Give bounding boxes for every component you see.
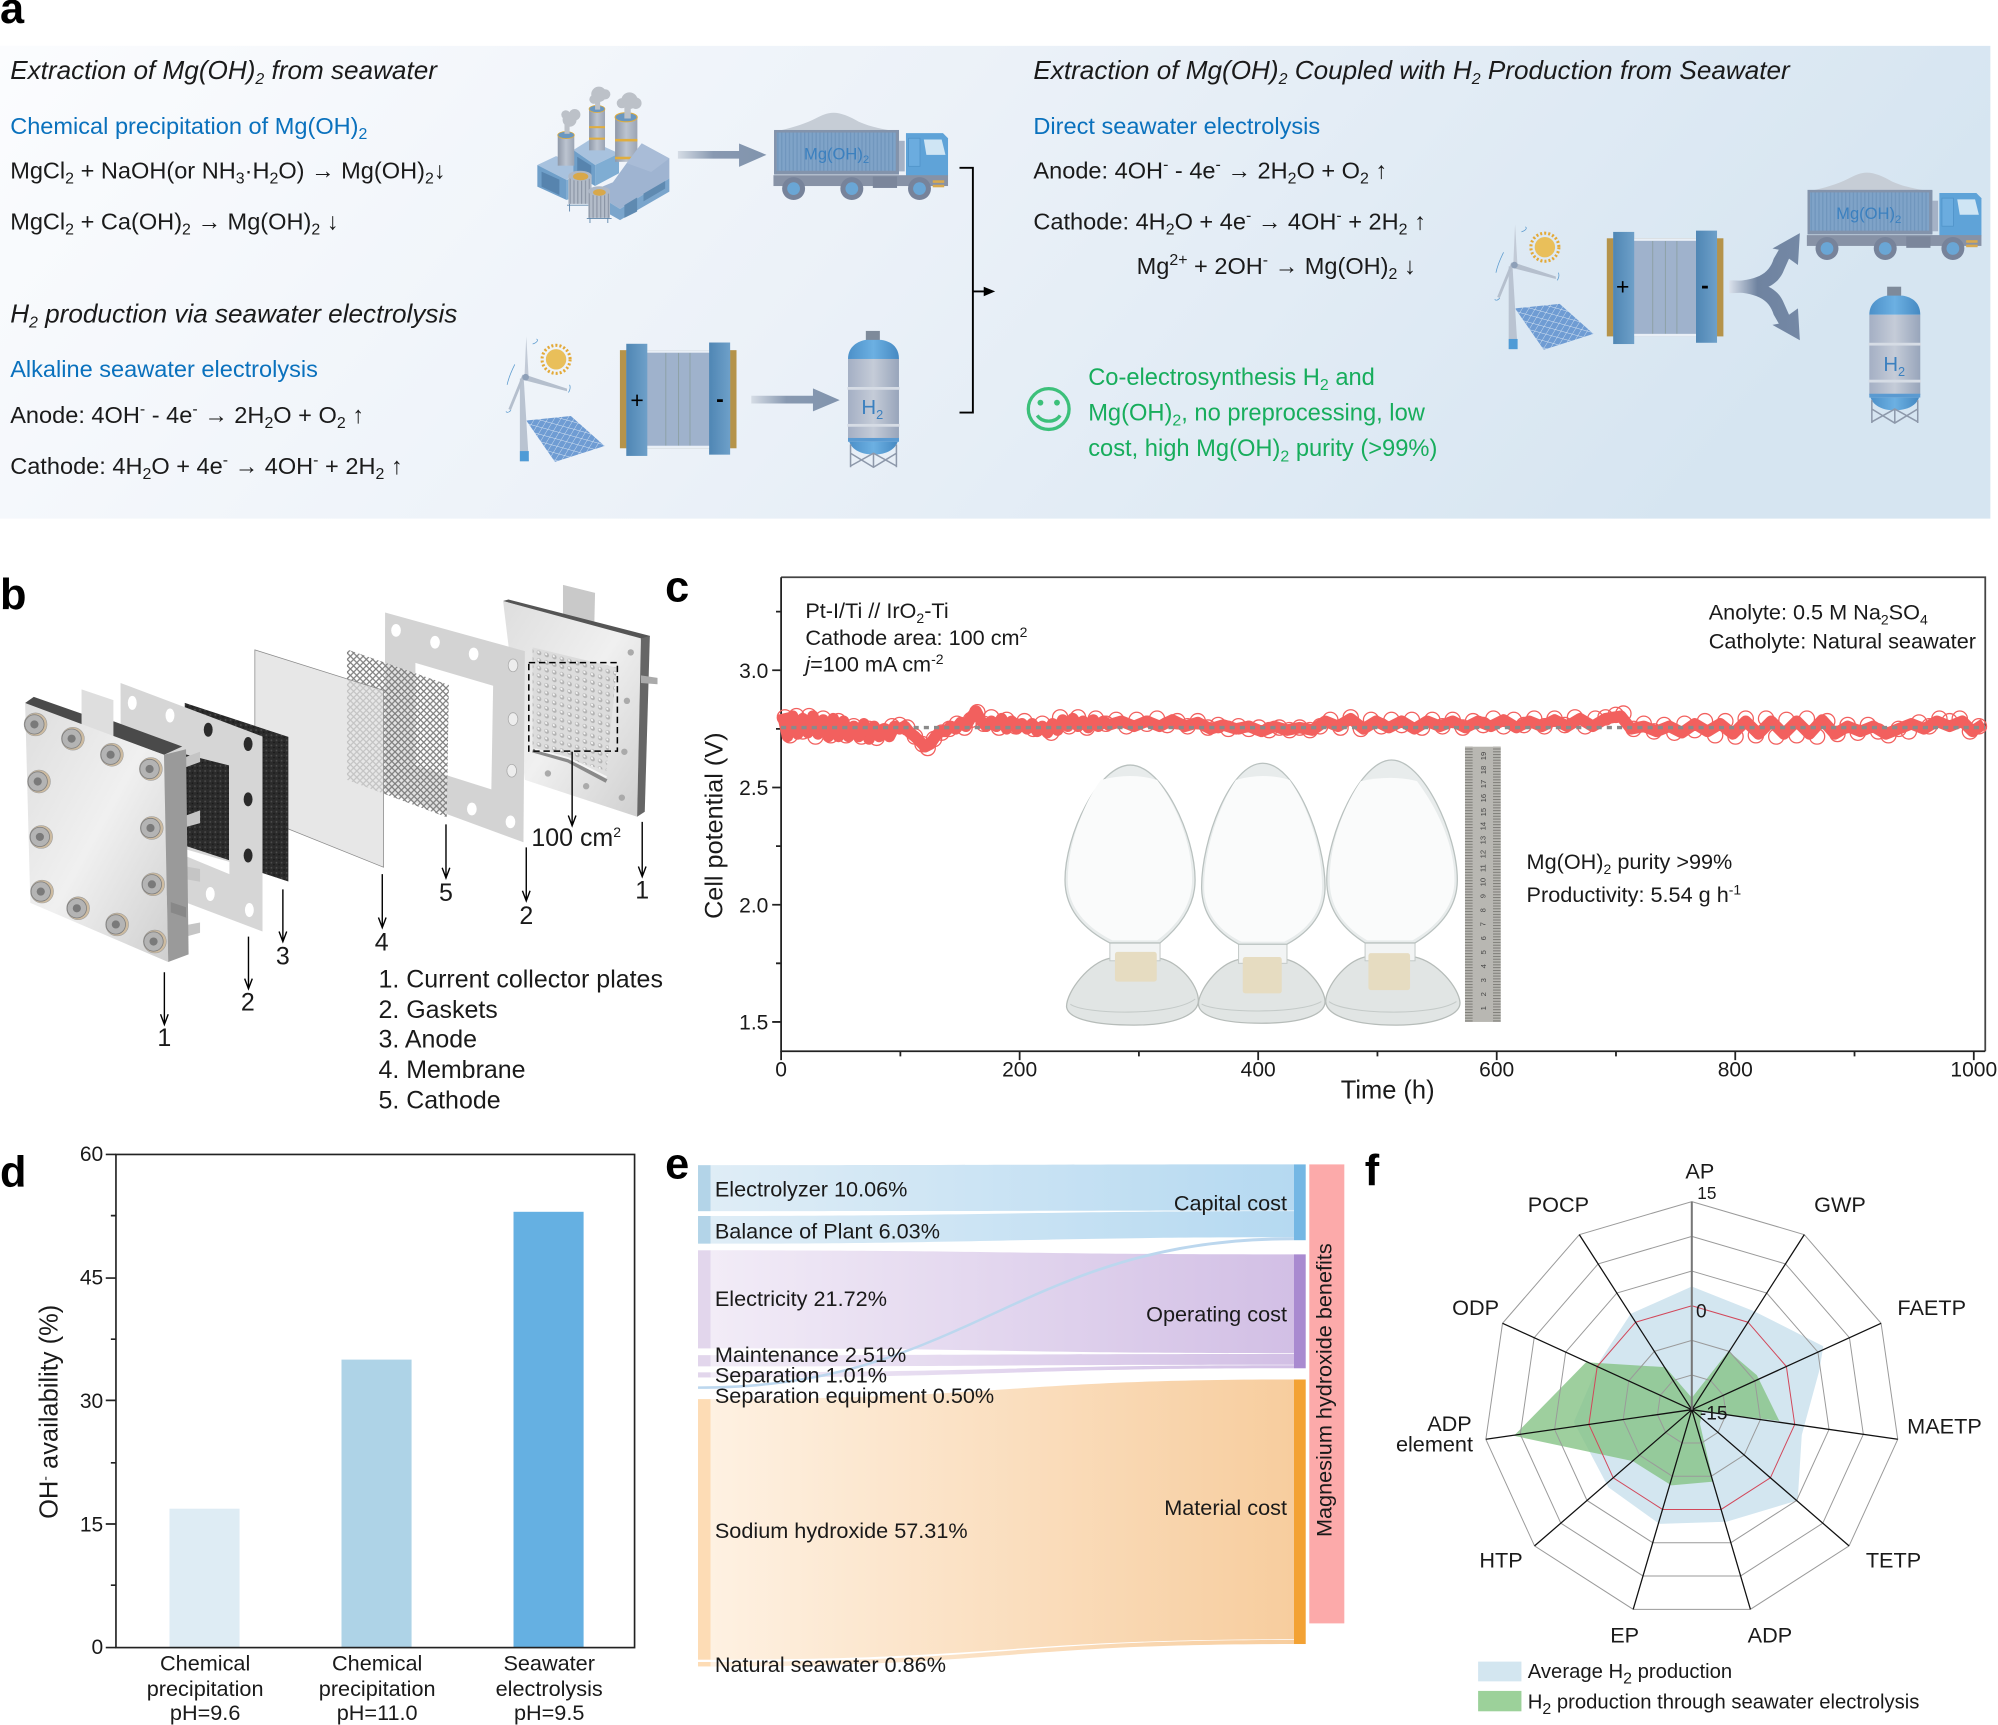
source labels: Natural seawater 0.86%: [715, 1652, 946, 1677]
legend: production through seawater electrolysis: [1551, 1692, 1919, 1714]
component legend: [378, 966, 663, 1115]
subheading: alkaline seawater electrolysis: Alkaline seawater electrolysis: [10, 356, 318, 382]
callout: benefits in green: 2: [1280, 448, 1289, 465]
category labels: electrolysis: [496, 1676, 603, 1701]
icon: electrolyzer (coupled route): +: [1616, 273, 1629, 299]
icon: truck (coupled route): [1807, 173, 1981, 260]
callout: benefits in green: purity (>99%): [1289, 436, 1437, 462]
equation: magnesium precipitation: 2+: [1169, 252, 1187, 269]
annotation: electrode and current density: -2: [931, 651, 944, 667]
axis labels: [1396, 1159, 1982, 1647]
heading: H2 production: 2: [28, 314, 38, 331]
icon: hydrogen tank (coupled route): H: [1883, 354, 1898, 376]
legend: 2: [1542, 1701, 1551, 1718]
callout: benefits in green: cost, high Mg(OH): [1088, 436, 1280, 462]
category labels: precipitation: [147, 1676, 264, 1701]
annotation: electrolytes: Catholyte: Natural seawater: [1709, 629, 1976, 654]
legend: Average H: [1528, 1661, 1623, 1683]
component legend: 4. Membrane: [378, 1056, 526, 1084]
equation: magnesium precipitation: -: [1263, 252, 1268, 269]
photo: ruler: [1465, 747, 1501, 1022]
callout: benefits in green: 2: [1172, 413, 1181, 430]
scale labels: 15: [1697, 1183, 1716, 1203]
panel label d: d: [0, 1148, 26, 1196]
scale labels: [1696, 1183, 1727, 1424]
equation: coupled cathode: -: [1336, 207, 1342, 224]
annotation: electrode and current density: 2: [916, 610, 924, 626]
panel d: OH- availability bar chart: [35, 1143, 635, 1725]
annotation: purity and productivity: -1: [1729, 882, 1741, 898]
category labels: pH=11.0: [337, 1700, 418, 1725]
source labels: Electricity 21.72%: [715, 1286, 887, 1311]
category labels: Seawater: [503, 1651, 595, 1676]
axis labels: TETP: [1866, 1547, 1921, 1572]
arrow: forked output: [1729, 233, 1800, 340]
component numbers: 2: [519, 902, 533, 930]
annotation: electrode and current density: Pt-I/Ti // IrO: [805, 598, 916, 623]
icon: electrolyzer (coupled route): [1607, 231, 1723, 344]
subheading: chemical precipitation: 2: [359, 126, 368, 143]
equation: coupled anode: → 2H: [1221, 157, 1288, 183]
category labels: precipitation: [319, 1676, 436, 1701]
operating cost node: [1294, 1254, 1306, 1368]
axis labels: AP: [1685, 1159, 1714, 1184]
equation: cathode: O + 4e: [151, 453, 223, 479]
component legend: 1. Current collector plates: [378, 966, 663, 994]
equation: coupled cathode: 2: [1399, 221, 1408, 238]
magnesium hydroxide benefits node: [1309, 1164, 1344, 1623]
legend: production: [1632, 1661, 1732, 1683]
equation: cathode: + 2H: [318, 453, 375, 479]
annotation: purity and productivity: purity >99%: [1611, 849, 1732, 874]
equation: MgCl2 + Ca(OH)2: + Ca(OH): [74, 208, 182, 234]
equation: coupled cathode: 2: [1166, 221, 1175, 238]
category labels: Material cost: [1164, 1495, 1287, 1520]
icon: truck carrying Mg(OH)2: Mg(OH): [804, 144, 863, 163]
panel label b: b: [0, 571, 26, 619]
component numbers: 4: [375, 929, 389, 957]
equation: coupled anode: Anode: 4OH: [1033, 157, 1163, 183]
y tick labels: 45: [80, 1266, 103, 1289]
photo: ruler: 11: [1479, 864, 1488, 872]
axis labels: ADP: [1427, 1411, 1472, 1436]
photo: ruler: 16: [1479, 794, 1488, 802]
axis labels: EP: [1610, 1622, 1639, 1647]
sankey flows: [698, 1164, 1294, 1666]
panel label e: e: [665, 1141, 689, 1189]
equation: MgCl2 + Ca(OH)2: 2: [182, 221, 191, 238]
x tick labels: [775, 1059, 1997, 1082]
legend: [1478, 1661, 1919, 1718]
equation: coupled anode: -: [1216, 156, 1221, 173]
annotation: purity and productivity: Productivity: 5.54 g h: [1527, 882, 1729, 907]
annotation: electrolytes: SO: [1889, 599, 1920, 624]
photo: ruler: 7: [1479, 922, 1488, 926]
equation: cathode: -: [313, 452, 318, 469]
left current collector plate with bolts: [24, 689, 200, 962]
cathode mesh: [347, 649, 449, 817]
source labels: Separation equipment 0.50%: [715, 1383, 994, 1408]
equation: coupled cathode: -: [1246, 207, 1251, 224]
y tick labels: 2.5: [739, 777, 768, 800]
y axis title: availability (%): [35, 1305, 63, 1476]
equation: anode: Anode: 4OH: [10, 402, 140, 428]
equation: MgCl2 + NaOH: 3: [236, 170, 245, 187]
equation: coupled anode: - 4e: [1168, 157, 1216, 183]
photo: ruler: 3: [1479, 978, 1488, 982]
equation: coupled cathode: + 2H: [1342, 208, 1399, 234]
y tick labels: 60: [80, 1143, 103, 1166]
icon: factory: [537, 87, 669, 223]
equation: MgCl2 + NaOH: 2: [269, 170, 278, 187]
source labels: Balance of Plant 6.03%: [715, 1219, 940, 1244]
heading: extraction of Mg(OH)2: from seawater: [264, 55, 438, 85]
active area label: 2: [613, 824, 621, 840]
dashed 100 cm2 active area: [529, 663, 617, 751]
source labels: Separation 1.01%: [715, 1363, 887, 1388]
x tick labels: 1000: [1950, 1059, 1997, 1082]
photo: ruler: 18: [1479, 766, 1488, 774]
bar: pH 9.6: [169, 1509, 240, 1648]
photo: ruler: 17: [1479, 780, 1488, 788]
membrane: [255, 650, 384, 867]
y tick labels: 3.0: [739, 660, 768, 683]
plot frame and axes: [772, 577, 1985, 1060]
equation: cathode: Cathode: 4H: [10, 453, 143, 479]
photo: ruler: 8: [1479, 908, 1488, 912]
heading: coupled extraction: 2: [1278, 71, 1288, 88]
component arrows: [161, 752, 646, 1024]
component numbers: 5: [439, 879, 453, 907]
annotation: electrolytes: 2: [1881, 611, 1889, 627]
annotation: electrode and current density: j=100 mA cm: [805, 652, 931, 677]
equation: anode: - 4e: [145, 402, 192, 428]
equation: magnesium precipitation: ↓: [1397, 253, 1416, 279]
callout: benefits in green: 2: [1320, 377, 1329, 394]
icon: hydrogen tank: 2: [876, 407, 883, 422]
y tick labels: [739, 660, 768, 1035]
left gasket: [121, 683, 262, 931]
arrow: factory to truck: [678, 143, 766, 167]
photo: ruler: 2: [1479, 992, 1488, 996]
equation: anode: 2: [264, 415, 273, 432]
icon: wind turbine, sun and solar panel: [506, 336, 605, 462]
icon: electrolyzer: [620, 343, 737, 456]
photo: ruler: 9: [1479, 894, 1488, 898]
equation: coupled anode: 2: [1288, 170, 1297, 187]
radar grid: [1486, 1202, 1898, 1609]
y tick labels: 2.0: [739, 894, 768, 917]
equation: MgCl2 + Ca(OH)2: ↓: [320, 208, 339, 234]
equation: coupled cathode: ↑: [1408, 208, 1426, 234]
equation: cathode: → 4OH: [228, 453, 313, 479]
heading: coupled extraction: Production from Seawater: [1481, 55, 1791, 85]
callout: benefits in green: and: [1329, 365, 1375, 391]
axes frame: [106, 1154, 635, 1648]
source labels: Electrolyzer 10.06%: [715, 1177, 907, 1202]
equation: MgCl2 + NaOH: ↓: [434, 157, 446, 183]
panel b: exploded view of electrolyzer: [24, 585, 663, 1115]
category labels: Chemical: [160, 1651, 250, 1676]
component numbers: 1: [635, 876, 649, 904]
axis labels: MAETP: [1907, 1414, 1982, 1439]
source labels: Maintenance 2.51%: [715, 1342, 906, 1367]
panel label c: c: [665, 563, 689, 611]
source labels: Sodium hydroxide 57.31%: [715, 1518, 968, 1543]
component legend: 3. Anode: [378, 1025, 477, 1053]
equation: anode: 2: [337, 415, 346, 432]
x axis title: Time (h): [1341, 1076, 1435, 1104]
series: average H2 production: [1574, 1286, 1823, 1524]
panel a: process comparison band: [0, 46, 1990, 519]
equation: cathode: ↑: [384, 453, 403, 479]
equation: MgCl2 + NaOH: + NaOH(or NH: [74, 157, 236, 183]
axis labels: POCP: [1528, 1192, 1589, 1217]
anode: [185, 703, 288, 882]
equation: anode: -: [140, 401, 145, 418]
photo: ruler: 19: [1479, 752, 1488, 760]
equation: anode: O + O: [273, 402, 337, 428]
bar: seawater electrolysis: [514, 1212, 584, 1648]
equation: MgCl2 + Ca(OH)2: 2: [311, 221, 320, 238]
series: H2 through seawater electrolysis: [1514, 1351, 1779, 1485]
mean voltage dashed line: [781, 726, 1985, 729]
panel e: cost sankey diagram: [698, 1164, 1344, 1677]
equation: MgCl2 + Ca(OH)2: MgCl: [10, 208, 65, 234]
equation: cathode: -: [223, 452, 228, 469]
equation: MgCl2 + Ca(OH)2: 2: [65, 221, 74, 238]
icon: hydrogen tank: [847, 331, 900, 467]
equation: coupled cathode: Cathode: 4H: [1033, 208, 1166, 234]
heading: H2 production: production via seawater electrolysis: [38, 298, 457, 328]
equation: magnesium precipitation: 2: [1389, 266, 1398, 283]
photo: ruler: 14: [1479, 821, 1488, 830]
y axis title: -: [37, 1476, 53, 1481]
equation: coupled cathode: O + 4e: [1175, 208, 1246, 234]
y tick labels: 0: [92, 1636, 103, 1659]
category labels: pH=9.6: [170, 1700, 240, 1725]
component numbers: 2: [241, 988, 255, 1016]
icon: electrolyzer: +: [630, 387, 644, 413]
bar: pH 11.0: [341, 1360, 412, 1648]
annotation: purity and productivity: 2: [1604, 861, 1612, 877]
panel c: stability chart: [700, 577, 1997, 1104]
y axis title: Cell potential (V): [700, 732, 728, 919]
photo: ruler: 13: [1479, 836, 1488, 844]
photo: ruler: 6: [1479, 936, 1488, 940]
right current collector plate: [503, 585, 658, 817]
equation: magnesium precipitation: + 2OH: [1187, 253, 1263, 279]
icon: truck carrying Mg(OH)2: 2: [863, 154, 869, 166]
annotation: electrode and current density: [802, 598, 1028, 677]
component legend: 5. Cathode: [378, 1087, 501, 1115]
annotation: electrolytes: Anolyte: 0.5 M Na: [1709, 599, 1881, 624]
annotation: electrode and current density: Cathode area: 100 cm: [805, 625, 1020, 650]
icon: hydrogen tank (coupled route): 2: [1898, 364, 1905, 379]
heading: H2 production: H: [10, 298, 29, 328]
source nodes: [698, 1165, 711, 1666]
material cost node: [1294, 1379, 1306, 1644]
annotation: electrode and current density: -Ti: [924, 598, 949, 623]
equation: MgCl2 + NaOH: O) → Mg(OH): [278, 157, 425, 183]
y tick labels: 15: [80, 1514, 103, 1537]
callout: benefits in green: , no preprocessing, low: [1181, 400, 1426, 426]
subheading: chemical precipitation: Chemical precipitation of Mg(OH): [10, 113, 359, 139]
equation: cathode: 2: [375, 466, 384, 483]
heading: coupled extraction: 2: [1471, 71, 1481, 88]
component numbers: [157, 876, 649, 1052]
heading: coupled extraction: Coupled with H: [1287, 55, 1472, 85]
icon: electrolyzer: -: [716, 385, 724, 411]
y tick labels: 1.5: [739, 1012, 768, 1035]
equation: cathode: 2: [143, 466, 152, 483]
legend: H: [1528, 1692, 1542, 1714]
x tick labels: 400: [1241, 1059, 1276, 1082]
equation: MgCl2 + NaOH: 2: [425, 170, 434, 187]
icon: renewable power (coupled route): [1495, 224, 1593, 350]
panel label f: f: [1365, 1147, 1380, 1195]
photo: ruler: 5: [1479, 950, 1488, 954]
icon: smiley: [1028, 389, 1069, 429]
callout: benefits in green: [1088, 365, 1437, 465]
icon: truck (coupled route): Mg(OH): [1836, 204, 1895, 223]
equation: coupled anode: -: [1163, 156, 1168, 173]
category labels: Capital cost: [1174, 1191, 1287, 1216]
photo: ruler: 15: [1479, 808, 1488, 816]
photo: ruler: 12: [1479, 850, 1488, 858]
icon: truck carrying Mg(OH)2: [773, 113, 948, 200]
y tick labels: 30: [80, 1390, 103, 1413]
icon: truck (coupled route): 2: [1895, 214, 1901, 226]
heading: extraction of Mg(OH)2: Extraction of Mg(OH): [10, 55, 255, 85]
source labels: [715, 1177, 994, 1677]
category labels: Operating cost: [1146, 1301, 1287, 1326]
annotation: purity and productivity: [1527, 849, 1741, 907]
magnesium hydroxide benefits node: Magnesium hydroxide benefits: [1312, 1243, 1337, 1537]
annotation: electrolytes: 4: [1920, 611, 1928, 627]
active area label: 100 cm: [531, 824, 613, 852]
equation: coupled anode: O + O: [1297, 157, 1360, 183]
axis labels: ODP: [1452, 1295, 1499, 1320]
x tick labels: 800: [1718, 1059, 1753, 1082]
axis labels: ADP: [1748, 1622, 1792, 1647]
category labels: [147, 1651, 603, 1725]
photo: ruler: 10: [1479, 878, 1488, 886]
photo: ruler: 1: [1479, 1006, 1488, 1010]
right gasket: [385, 613, 525, 842]
equation: MgCl2 + NaOH: 2: [65, 170, 74, 187]
component legend: 2. Gaskets: [378, 996, 498, 1024]
category labels: [1146, 1191, 1287, 1520]
equation: coupled anode: 2: [1360, 170, 1369, 187]
axis labels: FAETP: [1897, 1295, 1966, 1320]
axis labels: GWP: [1814, 1192, 1866, 1217]
annotation: electrolytes: [1709, 599, 1976, 654]
component numbers: 3: [276, 943, 290, 971]
icon: hydrogen tank (coupled route): [1869, 287, 1921, 423]
x tick labels: 200: [1002, 1059, 1037, 1082]
heading: coupled extraction: Extraction of Mg(OH): [1033, 55, 1279, 85]
category labels: pH=9.5: [514, 1700, 584, 1725]
callout: benefits in green: Co-electrosynthesis H: [1088, 365, 1320, 391]
equation: magnesium precipitation: → Mg(OH): [1268, 253, 1389, 279]
equation: coupled anode: ↑: [1369, 157, 1387, 183]
category labels: Chemical: [332, 1651, 422, 1676]
equation: magnesium precipitation: Mg: [1137, 253, 1169, 279]
y tick labels: [80, 1143, 103, 1659]
arrow: electrolyzer to tank: [751, 388, 840, 411]
scale labels: 0: [1696, 1302, 1707, 1323]
heading: extraction of Mg(OH)2: 2: [254, 71, 264, 88]
equation: MgCl2 + NaOH: MgCl: [10, 157, 65, 183]
annotation: electrode and current density: 2: [1020, 624, 1028, 640]
axis labels: element: [1396, 1431, 1473, 1456]
photo: ruler: 4: [1479, 963, 1488, 968]
icon: hydrogen tank: H: [861, 397, 876, 419]
equation: MgCl2 + NaOH: ·H: [245, 157, 269, 183]
icon: electrolyzer (coupled route): -: [1701, 272, 1709, 298]
capital cost node: [1294, 1164, 1306, 1240]
subheading: direct seawater electrolysis: Direct seawater electrolysis: [1033, 113, 1320, 139]
x tick labels: 600: [1479, 1059, 1514, 1082]
scale labels: -15: [1700, 1403, 1727, 1424]
photo: three flasks of Mg(OH)2 powder: [1065, 760, 1460, 1025]
equation: anode: → 2H: [198, 402, 264, 428]
equation: coupled cathode: → 4OH: [1251, 208, 1336, 234]
equation: anode: ↑: [346, 402, 364, 428]
equation: anode: -: [192, 401, 198, 418]
equation: MgCl2 + Ca(OH)2: → Mg(OH): [191, 208, 311, 234]
legend: 2: [1623, 1670, 1632, 1687]
bracket arrow joining both routes: [959, 168, 995, 413]
panel f: life-cycle radar chart: [1396, 1159, 1982, 1718]
y axis title: OH: [35, 1481, 63, 1519]
x tick labels: 0: [775, 1059, 787, 1082]
callout: benefits in green: Mg(OH): [1088, 400, 1172, 426]
axis labels: HTP: [1479, 1547, 1523, 1572]
component numbers: 1: [157, 1024, 171, 1052]
cell potential trace: [777, 705, 1987, 756]
annotation: purity and productivity: Mg(OH): [1527, 849, 1604, 874]
